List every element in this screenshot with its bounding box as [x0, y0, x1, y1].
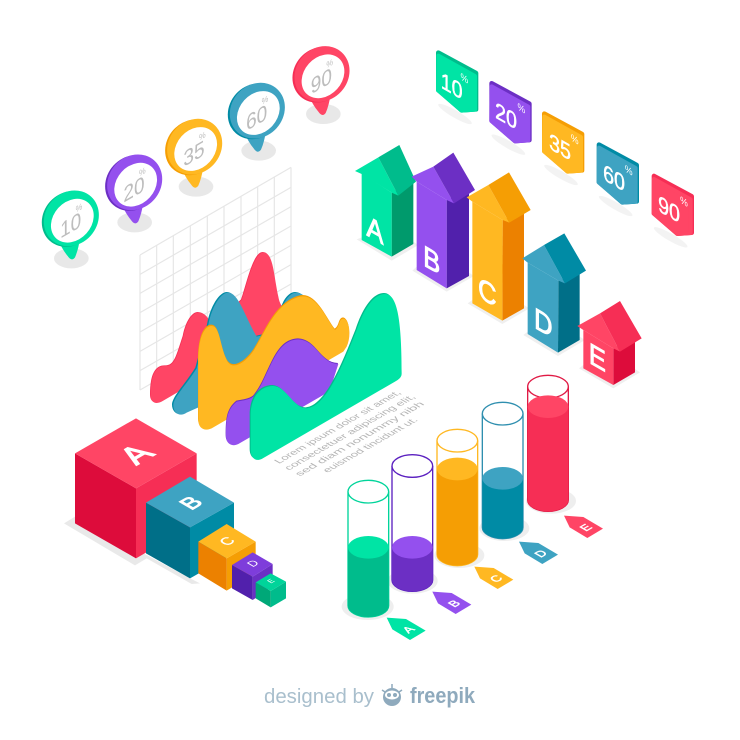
cube B [146, 477, 234, 578]
pin: 35 percent: % [199, 129, 206, 143]
pin: 90 percent: 90 [311, 62, 332, 99]
label tag E: E [576, 522, 595, 533]
label tag D: D [531, 548, 551, 559]
arrow A [355, 145, 418, 261]
tag: 60 percent [597, 145, 637, 219]
arrow D [522, 233, 586, 356]
arrow B: B [423, 239, 440, 282]
tag: 20 percent [490, 83, 529, 158]
tag: 20 percent: 20 [495, 96, 517, 135]
tag: 10 percent: 10 [441, 66, 463, 105]
tag: 90 percent: % [680, 195, 688, 210]
tag: 35 percent: % [571, 132, 579, 148]
tag: 35 percent [542, 114, 582, 188]
arrow E: E [589, 336, 606, 379]
pin: 10 percent: 10 [60, 207, 81, 244]
footer: freepik credit [264, 683, 476, 708]
arrow A: A [367, 209, 384, 252]
cube E [256, 573, 286, 607]
cube A [75, 418, 197, 558]
tag: 35 percent: 35 [549, 127, 571, 166]
text block: lorem ipsum: sed diam nonummy nibh [293, 400, 428, 478]
pin: 60 percent: 60 [246, 99, 267, 136]
pin: 20 percent [94, 143, 174, 232]
panel: area chart with grid [140, 167, 428, 478]
cube A: A [111, 440, 163, 470]
footer: freepik credit: freepik [410, 683, 476, 708]
label tag B: B [445, 598, 464, 609]
pin: 35 percent: 35 [183, 135, 205, 172]
text block: lorem ipsum: euismod tincidunt ut. [320, 416, 421, 474]
cube D [232, 552, 273, 600]
pin: 60 percent [216, 71, 296, 161]
label tag D [519, 542, 558, 564]
tag: 10 percent [436, 53, 476, 127]
arrow D: D [534, 301, 553, 345]
pin: 90 percent: % [326, 56, 333, 70]
tag: 90 percent: 90 [658, 190, 680, 228]
arrow C [467, 172, 531, 324]
footer: freepik credit: designed by [264, 686, 374, 708]
cylinder B [392, 455, 433, 591]
cylinder shadows [342, 488, 576, 620]
cube C: C [216, 535, 240, 548]
arrow E [577, 301, 642, 388]
label tag A [387, 618, 426, 640]
pin: 90 percent [281, 35, 361, 124]
cube E: E [265, 578, 277, 585]
tag: 90 percent [652, 176, 692, 250]
label tag C [474, 567, 513, 589]
cylinder A [348, 480, 389, 617]
area: yellow wave [198, 295, 349, 430]
cylinder E [528, 375, 568, 511]
cube D: D [245, 559, 262, 569]
pin: 35 percent [154, 107, 234, 197]
text block: lorem ipsum: consectetuer adipiscing elit, [282, 393, 419, 472]
panel: percentage map pins [30, 35, 361, 268]
area: green wave [250, 293, 402, 460]
arrow C: C [478, 271, 497, 314]
pin: 20 percent: 20 [123, 171, 145, 208]
pin: 10 percent: % [76, 201, 83, 215]
area: purple wave [226, 338, 338, 445]
panel: arrow bar chart [355, 145, 642, 388]
label tag C: C [486, 573, 506, 584]
tag: 60 percent: % [625, 163, 633, 179]
tag: 60 percent: 60 [603, 158, 625, 197]
label tag E [564, 516, 603, 538]
label tag A: A [399, 624, 418, 635]
tag: 10 percent: % [460, 71, 468, 87]
label tag B [432, 592, 471, 614]
cube C [198, 524, 256, 591]
panel: cylinder chart [342, 375, 603, 640]
icon: freepik mascot [382, 684, 402, 706]
panel: percentage tags [436, 53, 692, 250]
cube B: B [173, 492, 209, 513]
cylinder C [437, 429, 478, 566]
tag: 20 percent: % [517, 101, 525, 117]
pin: 20 percent: % [139, 165, 146, 179]
panel: stacked cubes [64, 418, 286, 607]
pin: 10 percent [30, 179, 110, 268]
area: red wave [150, 252, 290, 403]
text block: lorem ipsum [272, 389, 428, 478]
arrow B [412, 153, 475, 292]
cylinder D [482, 402, 523, 539]
text block: lorem ipsum: Lorem ipsum dolor sit amet, [272, 389, 404, 465]
area: blue wave [172, 292, 305, 415]
pin: 60 percent: % [262, 93, 269, 107]
